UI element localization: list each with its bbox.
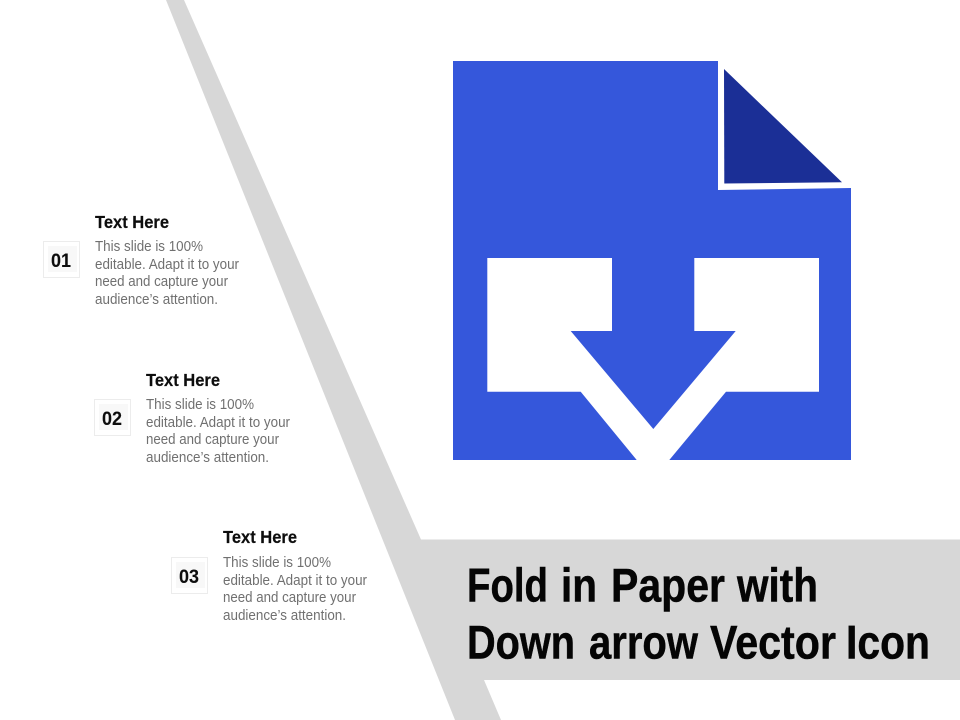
title: Vector [710, 616, 836, 668]
number badge 03: 03 [179, 566, 199, 588]
body text 02: audience’s attention. [146, 450, 269, 466]
body text 01: This slide is 100% [95, 239, 203, 255]
body text 03: need and capture your [223, 590, 356, 606]
title: in [561, 558, 597, 612]
number badge 03 [172, 558, 208, 594]
body text 03: audience’s attention. [223, 608, 346, 624]
title: Fold [467, 558, 548, 612]
heading 03: Text Here [223, 527, 297, 547]
title: Paper [611, 558, 725, 612]
body text 01 [95, 239, 239, 308]
heading 01: Text Here [95, 212, 169, 232]
paper sheet [453, 61, 851, 460]
item 01 [44, 212, 239, 308]
body text 02 [146, 397, 290, 466]
body text 03: editable. Adapt it to your [223, 573, 367, 589]
body text 03 [223, 555, 367, 624]
number badge 01: 01 [51, 250, 71, 272]
body text 02: This slide is 100% [146, 397, 254, 413]
title: arrow [589, 616, 698, 668]
item 03 [172, 527, 367, 624]
body text 01: need and capture your [95, 274, 228, 290]
title: with [736, 558, 818, 612]
body text 02: need and capture your [146, 432, 279, 448]
heading 02: Text Here [146, 370, 220, 390]
item 02 [94, 370, 290, 466]
title: Down [467, 616, 575, 668]
icon: folded paper with down arrow [453, 61, 851, 460]
number badge 01 [44, 242, 80, 278]
body text 01: editable. Adapt it to your [95, 257, 239, 273]
number badge 02: 02 [102, 408, 122, 430]
title: Icon [846, 616, 930, 668]
number badge 02 [94, 400, 130, 436]
body text 02: editable. Adapt it to your [146, 415, 290, 431]
body text 03: This slide is 100% [223, 555, 331, 571]
title [467, 558, 930, 668]
folded corner [724, 69, 842, 184]
body text 01: audience’s attention. [95, 292, 218, 308]
